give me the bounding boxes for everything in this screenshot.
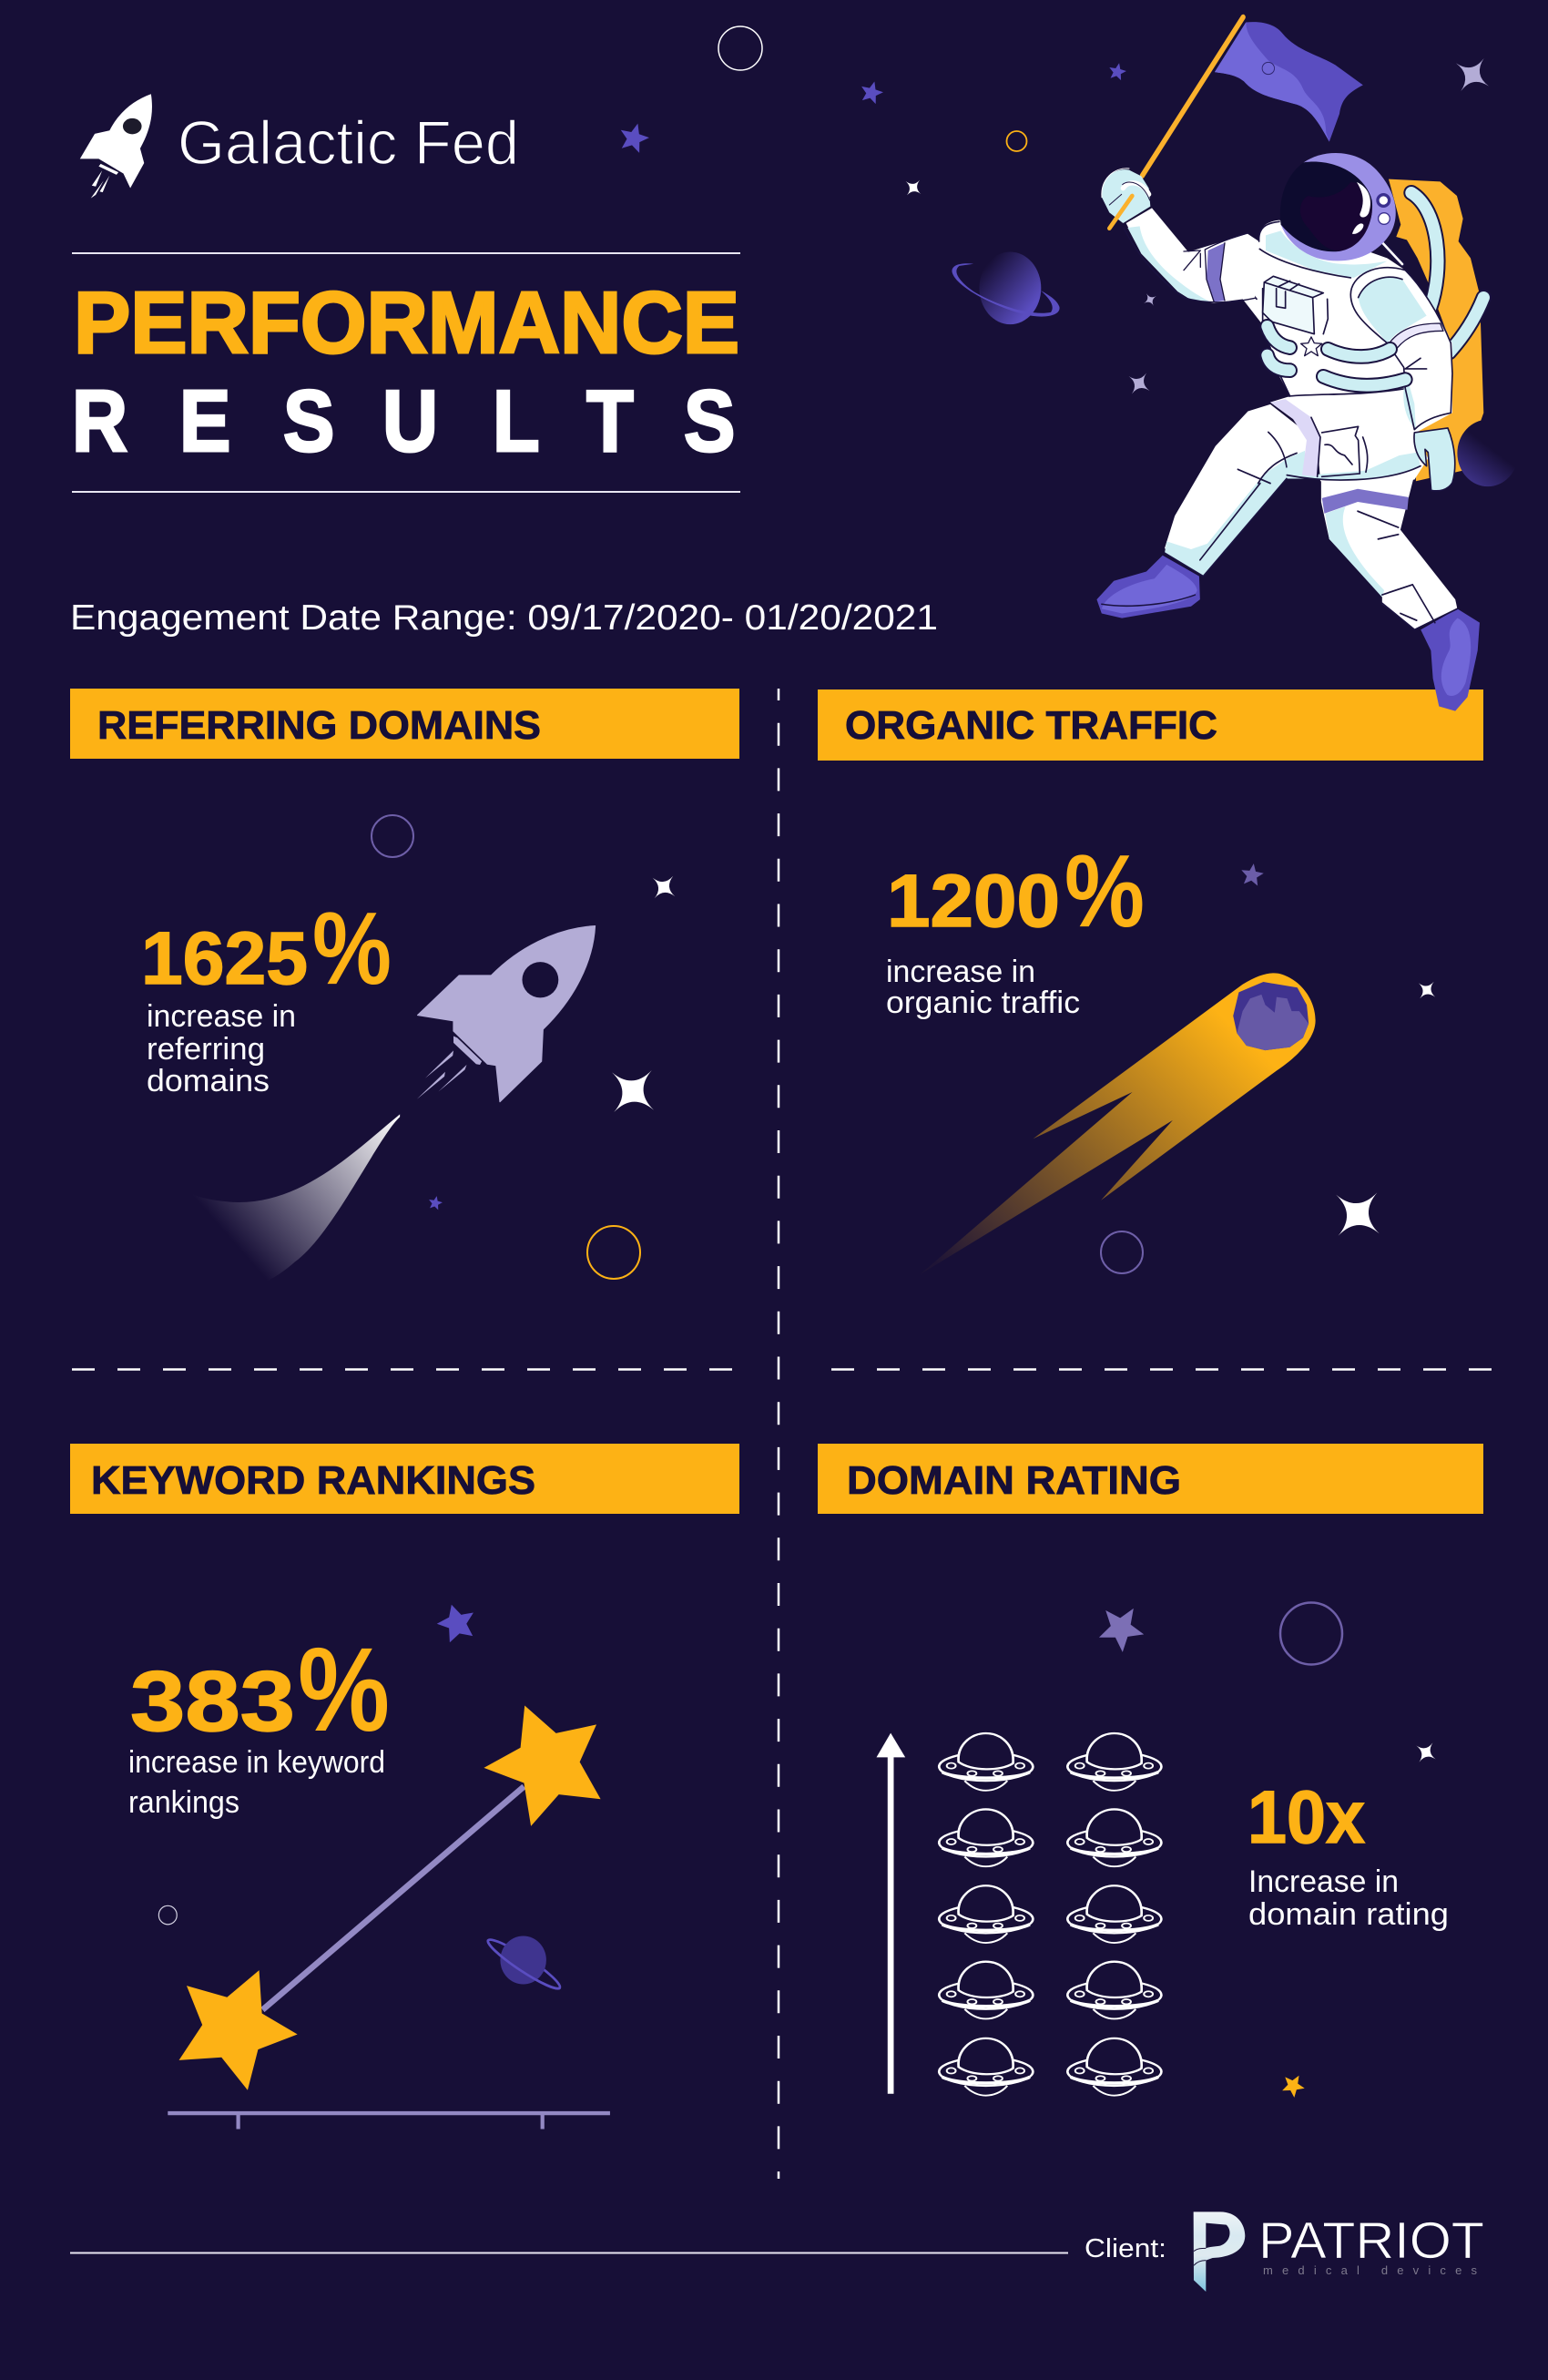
stat description: Increase in	[1248, 1864, 1399, 1899]
stat: 1200%: 1200	[887, 860, 1060, 943]
leg: right with boot	[1321, 474, 1480, 711]
footer	[70, 2211, 1484, 2292]
wordmark: PATRIOT	[1258, 2211, 1484, 2270]
stat: 1200%: %	[1064, 833, 1145, 948]
stat description	[128, 1745, 385, 1820]
heading: PERFORMANCE: PERFORMANCE	[74, 274, 739, 372]
upper body, raised arm, chest pack, straps, helmet	[1102, 153, 1455, 491]
leg: left with boot	[1096, 404, 1321, 618]
icon: ringed planet	[952, 252, 1060, 324]
panel: keyword rankings	[70, 1444, 739, 2129]
chart: rising line between two stars	[168, 1705, 610, 2129]
logo: Galactic Fed	[80, 94, 519, 199]
glove on pole	[1102, 169, 1150, 229]
straps	[1268, 326, 1405, 385]
right arm and shoulder	[1350, 268, 1455, 491]
stat: 383%	[130, 1622, 390, 1756]
stat description: increase in	[147, 999, 296, 1034]
torso and pelvis	[1241, 220, 1452, 481]
stat: 1625%	[141, 891, 392, 1006]
icon grid: ten flying saucers	[939, 1733, 1161, 2096]
logo wordmark: Galactic Fed	[178, 108, 519, 178]
chest pack	[1263, 276, 1328, 334]
icon: rocket with trail	[193, 926, 595, 1289]
backpack and tubes	[1389, 179, 1483, 481]
icon: comet	[920, 973, 1316, 1274]
stat: 1625%: %	[312, 891, 392, 1006]
heading bar: keyword rankings: KEYWORD RANKINGS	[91, 1458, 535, 1503]
dashed dividers	[72, 689, 1492, 2179]
client label: Client:	[1085, 2234, 1166, 2263]
illustration: astronaut holding flag	[1096, 17, 1518, 711]
dark planet	[1457, 420, 1518, 486]
decorative stars, circle and planet	[158, 1605, 564, 1994]
heading bar: referring domains	[70, 689, 739, 759]
helmet	[1280, 153, 1402, 264]
panel: referring domains	[70, 689, 739, 1289]
client logo: Patriot Medical Devices	[1194, 2211, 1484, 2292]
panel: domain rating	[818, 1444, 1483, 2099]
stat: 10x: 10x	[1248, 1776, 1365, 1859]
raised arm	[1124, 208, 1255, 303]
stat description: increase in keyword	[128, 1745, 385, 1780]
flag	[1142, 17, 1363, 176]
decorative stars and circles	[1101, 862, 1442, 1273]
stat: 383%: 383	[130, 1653, 295, 1749]
stat description: domain rating	[1248, 1897, 1449, 1932]
panel: organic traffic	[818, 689, 1483, 1274]
stat description	[886, 955, 1080, 1020]
stat description	[147, 999, 296, 1098]
heading bar: keyword rankings	[70, 1444, 739, 1514]
stat description: rankings	[128, 1785, 239, 1820]
heading bar: domain rating	[818, 1444, 1483, 1514]
stat description: domains	[147, 1064, 270, 1098]
tagline: medical devices	[1263, 2263, 1477, 2277]
stat description: organic traffic	[886, 986, 1080, 1020]
heading bar: organic traffic: ORGANIC TRAFFIC	[845, 703, 1217, 748]
engagement date range: Engagement Date Range: 09/17/2020- 01/20/2021	[70, 598, 938, 638]
heading bar: referring domains: REFERRING DOMAINS	[97, 703, 541, 748]
stat: 383%: %	[298, 1622, 390, 1756]
icon: white logo rocket	[80, 94, 152, 199]
decorative stars and circle	[1097, 1603, 1442, 2099]
stat: 1625%: 1625	[141, 917, 308, 1000]
decorative stars and circles	[372, 815, 685, 1279]
heading: RESULTS: RESULTS	[72, 373, 735, 470]
stat description: referring	[147, 1032, 265, 1067]
heading bar: domain rating: DOMAIN RATING	[847, 1458, 1181, 1503]
heading bar: organic traffic	[818, 689, 1483, 761]
arrow: upward	[876, 1733, 905, 2094]
stat description	[1248, 1864, 1449, 1932]
icon: Patriot P mark	[1194, 2211, 1245, 2292]
title: PERFORMANCE RESULTS	[72, 252, 740, 493]
stat: 1200%	[887, 833, 1145, 948]
stat description: increase in	[886, 955, 1035, 989]
decorative stars and circles in header	[616, 26, 1501, 401]
